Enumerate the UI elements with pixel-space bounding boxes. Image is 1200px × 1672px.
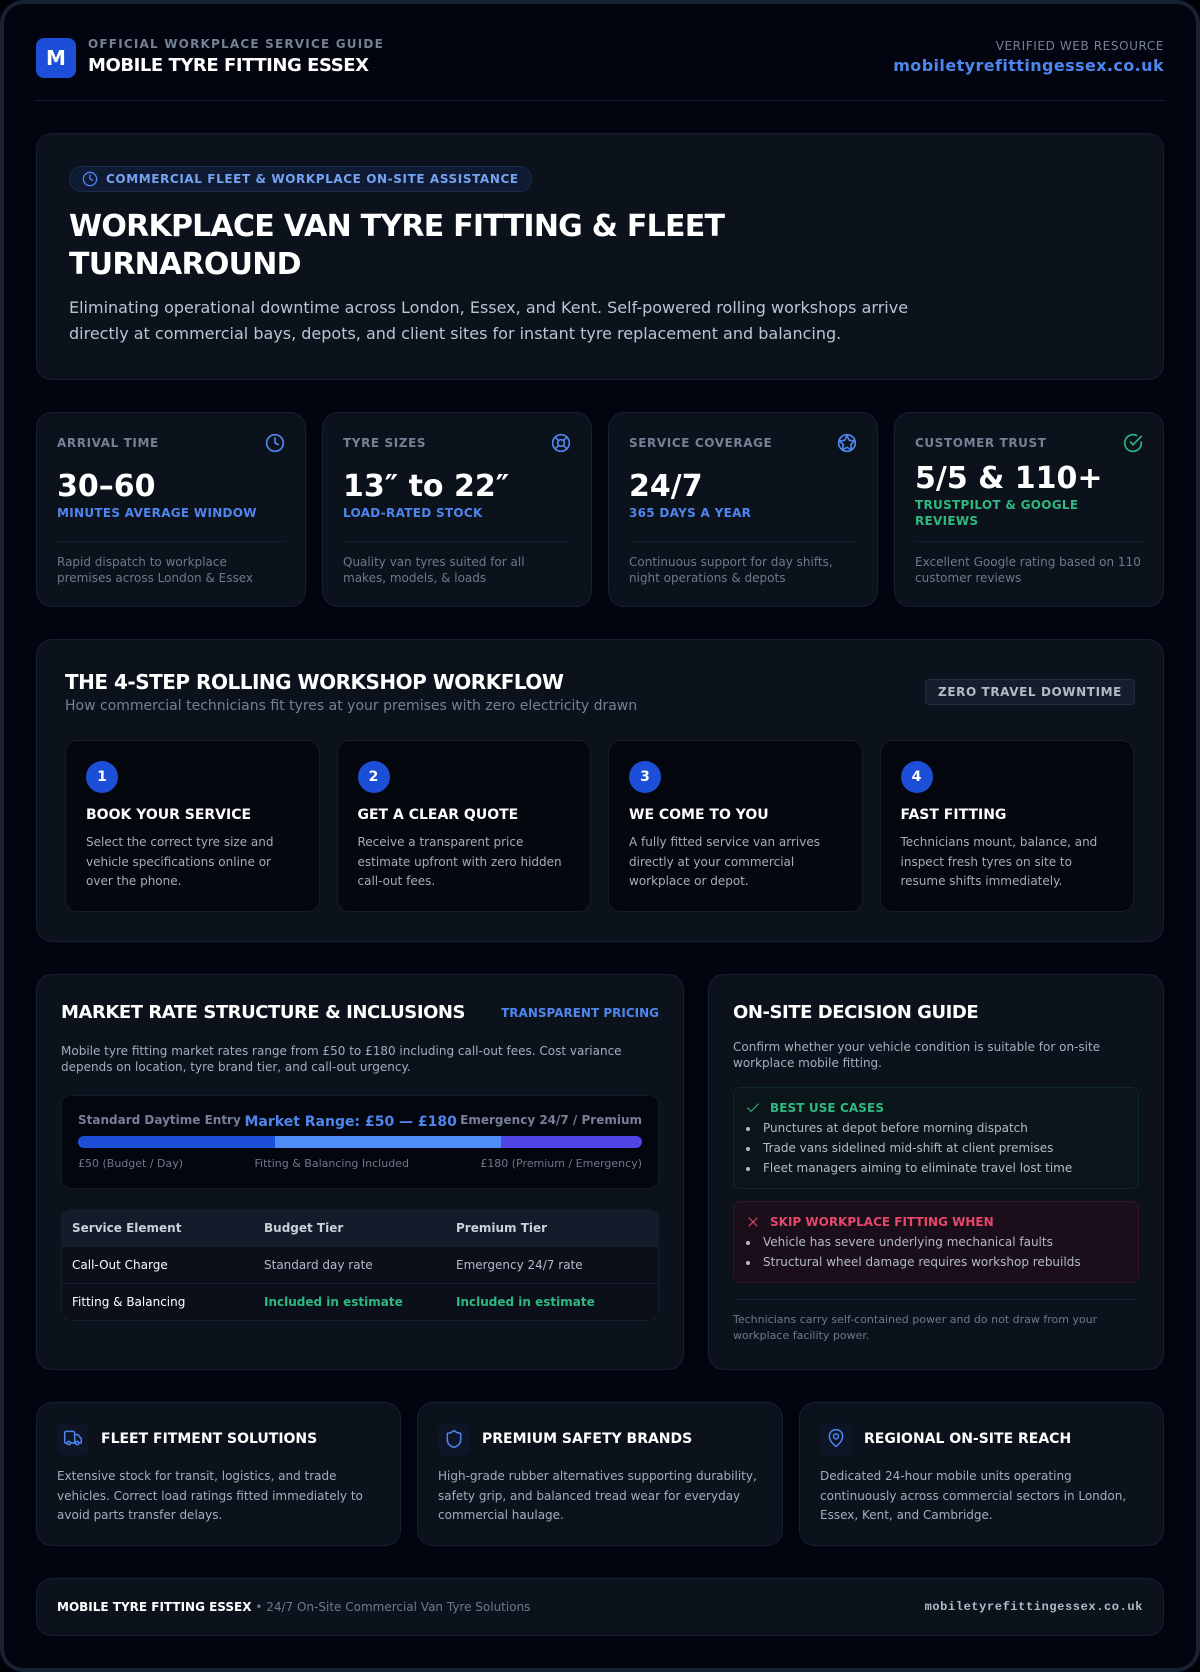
stat description bbox=[57, 555, 253, 585]
stat card: service coverage bbox=[608, 412, 878, 607]
panel paragraph: depends on location, tyre brand tier, and call-out urgency. bbox=[61, 1060, 411, 1074]
high label: Emergency 24/7 / Premium bbox=[460, 1113, 642, 1127]
stat description: Continuous support for day shifts, bbox=[629, 555, 833, 569]
hero paragraph bbox=[69, 298, 908, 343]
stat description: Quality van tyres suited for all bbox=[343, 555, 525, 569]
use case 1: Punctures at depot before morning dispatch bbox=[763, 1121, 1028, 1135]
stat label: TYRE SIZES bbox=[343, 436, 426, 450]
step text: Select the correct tyre size and bbox=[86, 835, 274, 849]
panel heading: MARKET RATE STRUCTURE & INCLUSIONS bbox=[61, 1002, 465, 1023]
workflow subheading: How commercial technicians fit tyres at your premises with zero electricity drawn bbox=[65, 698, 637, 714]
verified label: VERIFIED WEB RESOURCE bbox=[996, 39, 1164, 53]
feature text: vehicles. Correct load ratings fitted immediately to bbox=[57, 1488, 363, 1502]
brand name: MOBILE TYRE FITTING ESSEX bbox=[88, 55, 369, 76]
hero headline bbox=[69, 209, 725, 282]
step title: FAST FITTING bbox=[900, 807, 1006, 823]
stat unit: REVIEWS bbox=[915, 514, 978, 528]
feature card: regional reach bbox=[799, 1402, 1164, 1546]
step text bbox=[900, 835, 1097, 888]
stat description bbox=[629, 555, 833, 585]
panel paragraph: Confirm whether your vehicle condition is suitable for on-site bbox=[733, 1040, 1100, 1054]
workflow heading: THE 4-STEP ROLLING WORKSHOP WORKFLOW bbox=[65, 670, 563, 694]
stat card: arrival time bbox=[36, 412, 306, 607]
step number bbox=[900, 761, 932, 793]
feature text: continuously across commercial sectors in London, bbox=[820, 1488, 1126, 1502]
budget call-out: Standard day rate bbox=[264, 1258, 373, 1272]
stat value: 24/7 bbox=[629, 469, 703, 504]
stat description bbox=[343, 555, 525, 585]
feature title: FLEET FITMENT SOLUTIONS bbox=[101, 1431, 317, 1447]
step number: 4 bbox=[912, 769, 921, 785]
pill label: COMMERCIAL FLEET & WORKPLACE ON-SITE ASSISTANCE bbox=[106, 172, 519, 186]
premium call-out: Emergency 24/7 rate bbox=[456, 1258, 583, 1272]
stat value: 30–60 bbox=[57, 469, 156, 504]
hero headline: TURNAROUND bbox=[69, 247, 301, 282]
box title: BEST USE CASES bbox=[770, 1101, 884, 1115]
panel heading: ON-SITE DECISION GUIDE bbox=[733, 1002, 978, 1023]
step text: over the phone. bbox=[86, 874, 181, 888]
feature text: commercial haulage. bbox=[438, 1508, 564, 1522]
feature text: High-grade rubber alternatives supporting durability, bbox=[438, 1469, 757, 1483]
step text: Technicians mount, balance, and bbox=[900, 835, 1097, 849]
tag: zero travel downtime bbox=[925, 679, 1135, 705]
panel paragraph: workplace mobile fitting. bbox=[733, 1056, 882, 1070]
step number bbox=[358, 761, 390, 793]
feature title: REGIONAL ON-SITE REACH bbox=[864, 1431, 1071, 1447]
low label: Standard Daytime Entry bbox=[78, 1113, 241, 1127]
stat unit: 365 DAYS A YEAR bbox=[629, 506, 751, 520]
feature title: PREMIUM SAFETY BRANDS bbox=[482, 1431, 692, 1447]
footer brand line: MOBILE TYRE FITTING ESSEX • 24/7 On-Site Commercial Van Tyre Solutions bbox=[57, 1600, 530, 1614]
stat description: customer reviews bbox=[915, 571, 1021, 585]
footnote: workplace facility power. bbox=[733, 1329, 869, 1342]
header bbox=[36, 37, 1164, 101]
stat value: 13″ to 22″ bbox=[343, 469, 509, 504]
table header: premium tier: Premium Tier bbox=[456, 1221, 547, 1235]
skip case 1: Vehicle has severe underlying mechanical faults bbox=[763, 1235, 1053, 1249]
footnote: Technicians carry self-contained power and do not draw from your bbox=[733, 1313, 1097, 1326]
box title: SKIP WORKPLACE FITTING WHEN bbox=[770, 1215, 994, 1229]
step text: workplace or depot. bbox=[629, 874, 749, 888]
website url: mobiletyrefittingessex.co.uk bbox=[893, 56, 1164, 75]
hero paragraph: directly at commercial bays, depots, and client sites for instant tyre replacement and balancing. bbox=[69, 324, 841, 343]
feature text: avoid parts transfer delays. bbox=[57, 1508, 222, 1522]
hero headline: WORKPLACE VAN TYRE FITTING & FLEET bbox=[69, 209, 724, 244]
step text: resume shifts immediately. bbox=[900, 874, 1062, 888]
use case 2: Trade vans sidelined mid-shift at client premises bbox=[763, 1141, 1053, 1155]
step text bbox=[86, 835, 274, 888]
stat description: Rapid dispatch to workplace bbox=[57, 555, 227, 569]
table header: service element: Service Element bbox=[72, 1221, 181, 1235]
step text: A fully fitted service van arrives bbox=[629, 835, 820, 849]
step text: inspect fresh tyres on site to bbox=[900, 854, 1072, 868]
premium caption: £180 (Premium / Emergency) bbox=[480, 1157, 642, 1170]
skip case 2: Structural wheel damage requires workshop rebuilds bbox=[763, 1255, 1081, 1269]
feature card: safety brands bbox=[417, 1402, 783, 1546]
feature text bbox=[820, 1469, 1126, 1522]
footer bar bbox=[36, 1578, 1164, 1636]
budget fitting: Included in estimate bbox=[264, 1295, 403, 1309]
panel paragraph bbox=[733, 1040, 1100, 1070]
eyebrow text: OFFICIAL WORKPLACE SERVICE GUIDE bbox=[88, 37, 384, 51]
table header: budget tier: Budget Tier bbox=[264, 1221, 343, 1235]
use case 3: Fleet managers aiming to eliminate travel lost time bbox=[763, 1161, 1072, 1175]
step 3 bbox=[608, 740, 862, 912]
step text bbox=[358, 835, 562, 888]
hero pill tag bbox=[69, 166, 532, 192]
step 1 bbox=[65, 740, 320, 912]
transparent pricing tag: TRANSPARENT PRICING bbox=[501, 1006, 659, 1020]
market range label: Market Range: £50 — £180 bbox=[244, 1114, 457, 1130]
icon: clock bbox=[82, 172, 98, 186]
footnote bbox=[733, 1313, 1098, 1342]
feature text bbox=[57, 1469, 363, 1522]
step number: 3 bbox=[640, 769, 650, 785]
step title: GET A CLEAR QUOTE bbox=[358, 807, 518, 823]
step text: directly at your commercial bbox=[629, 854, 794, 868]
step 4 bbox=[880, 740, 1134, 912]
feature text: safety grip, and balanced tread wear for everyday bbox=[438, 1488, 740, 1502]
icon: star badge bbox=[838, 434, 856, 452]
stat description: makes, models, & loads bbox=[343, 571, 486, 585]
icon: truck bbox=[57, 1423, 89, 1455]
logo badge bbox=[36, 38, 76, 78]
feature text: Essex, Kent, and Cambridge. bbox=[820, 1508, 993, 1522]
panel paragraph: Mobile tyre fitting market rates range from £50 to £180 including call-out fees. Cost variance bbox=[61, 1044, 622, 1058]
step text: estimate upfront with zero hidden bbox=[358, 854, 562, 868]
icon: circle check bbox=[1124, 434, 1142, 452]
step text: call-out fees. bbox=[358, 874, 435, 888]
icon: cross bbox=[748, 1217, 758, 1227]
step 2 bbox=[336, 740, 591, 912]
tag: zero travel downtime: ZERO TRAVEL DOWNTIME bbox=[938, 685, 1122, 699]
panel: hero bbox=[36, 133, 1164, 380]
skip fitting box bbox=[733, 1201, 1139, 1283]
step text: vehicle specifications online or bbox=[86, 854, 271, 868]
step title: WE COME TO YOU bbox=[629, 807, 769, 823]
step number bbox=[86, 761, 118, 793]
row: call-out charge: Call-Out Charge bbox=[72, 1258, 168, 1272]
panel: on-site decision guide bbox=[708, 974, 1164, 1370]
row: fitting and balancing: Fitting & Balancing bbox=[72, 1295, 185, 1309]
budget caption: £50 (Budget / Day) bbox=[78, 1157, 183, 1170]
panel paragraph bbox=[61, 1044, 622, 1074]
stat unit bbox=[915, 498, 1078, 528]
stat label: ARRIVAL TIME bbox=[57, 436, 159, 450]
range bar bbox=[78, 1136, 642, 1148]
icon: clock bbox=[266, 434, 284, 452]
logo badge: M bbox=[46, 46, 66, 70]
step number bbox=[629, 761, 661, 793]
icon: map pin bbox=[820, 1423, 852, 1455]
step number: 2 bbox=[369, 769, 378, 785]
stat unit: LOAD-RATED STOCK bbox=[343, 506, 483, 520]
feature text: Dedicated 24-hour mobile units operating bbox=[820, 1469, 1072, 1483]
stat label: SERVICE COVERAGE bbox=[629, 436, 772, 450]
feature text: Extensive stock for transit, logistics, and trade bbox=[57, 1469, 337, 1483]
footer url: mobiletyrefittingessex.co.uk bbox=[925, 1600, 1143, 1614]
icon: check bbox=[747, 1103, 759, 1112]
hero paragraph: Eliminating operational downtime across London, Essex, and Kent. Self-powered rolling workshops arrive bbox=[69, 298, 908, 317]
stat description bbox=[915, 555, 1141, 585]
step title: BOOK YOUR SERVICE bbox=[86, 807, 251, 823]
step text bbox=[629, 835, 820, 888]
stat description: night operations & depots bbox=[629, 571, 785, 585]
stat description: Excellent Google rating based on 110 bbox=[915, 555, 1141, 569]
panel: 4-step workflow bbox=[36, 639, 1164, 942]
icon: life buoy bbox=[552, 434, 570, 452]
step text: Receive a transparent price bbox=[358, 835, 523, 849]
stat card: customer trust bbox=[894, 412, 1164, 607]
stat card: tyre sizes bbox=[322, 412, 592, 607]
icon: shield bbox=[438, 1423, 470, 1455]
stat label: CUSTOMER TRUST bbox=[915, 436, 1047, 450]
premium fitting: Included in estimate bbox=[456, 1295, 595, 1309]
stat value: 5/5 & 110+ bbox=[915, 461, 1103, 496]
step number: 1 bbox=[97, 769, 107, 785]
best use cases box bbox=[733, 1087, 1139, 1189]
feature card: fleet fitment bbox=[36, 1402, 401, 1546]
panel: market rate structure bbox=[36, 974, 684, 1370]
price range bar box bbox=[61, 1095, 659, 1189]
stat unit: MINUTES AVERAGE WINDOW bbox=[57, 506, 257, 520]
pricing table bbox=[61, 1209, 659, 1321]
stat unit: TRUSTPILOT & GOOGLE bbox=[915, 498, 1078, 512]
middle caption: Fitting & Balancing Included bbox=[254, 1157, 409, 1170]
feature text bbox=[438, 1469, 757, 1522]
stat description: premises across London & Essex bbox=[57, 571, 253, 585]
